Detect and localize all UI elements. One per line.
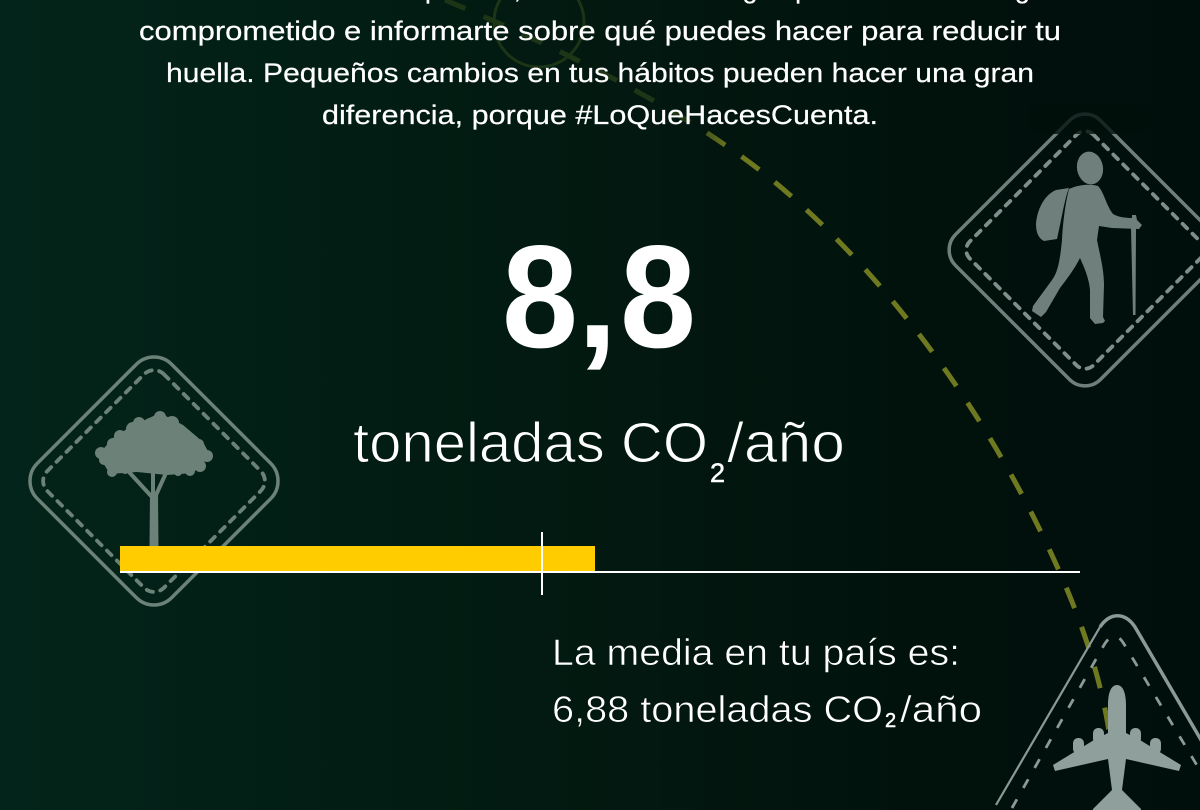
big number: 8 (620, 215, 696, 378)
icon: tree sign (20, 347, 288, 615)
national average note: 6,88 toneladas CO (552, 689, 883, 730)
dashed route (445, 0, 1122, 810)
icon: hiker sign (940, 105, 1200, 395)
progress bar (120, 532, 1080, 595)
unit label: 2 (710, 458, 725, 488)
unit label (353, 411, 845, 488)
intro text: comprometido e informarte sobre qué puedes hacer para reducir tu (139, 16, 1061, 46)
national average note: La media en tu país es: (552, 632, 960, 673)
unit label: /año (727, 411, 845, 475)
icon: airplane sign (996, 616, 1200, 810)
national average note: 2 (885, 710, 896, 732)
intro text: diferencia, porque #LoQueHacesCuenta. (322, 100, 878, 130)
big number (502, 215, 696, 378)
faint location circle (494, 0, 584, 67)
national average note (552, 632, 982, 732)
intro text (139, 0, 1061, 130)
unit label: toneladas CO (353, 411, 708, 475)
national average note: /año (900, 689, 982, 730)
intro text: huella. Pequeños cambios en tus hábitos pueden hacer una gran (166, 58, 1034, 88)
big number: , (577, 215, 618, 378)
big number: 8 (502, 215, 578, 378)
